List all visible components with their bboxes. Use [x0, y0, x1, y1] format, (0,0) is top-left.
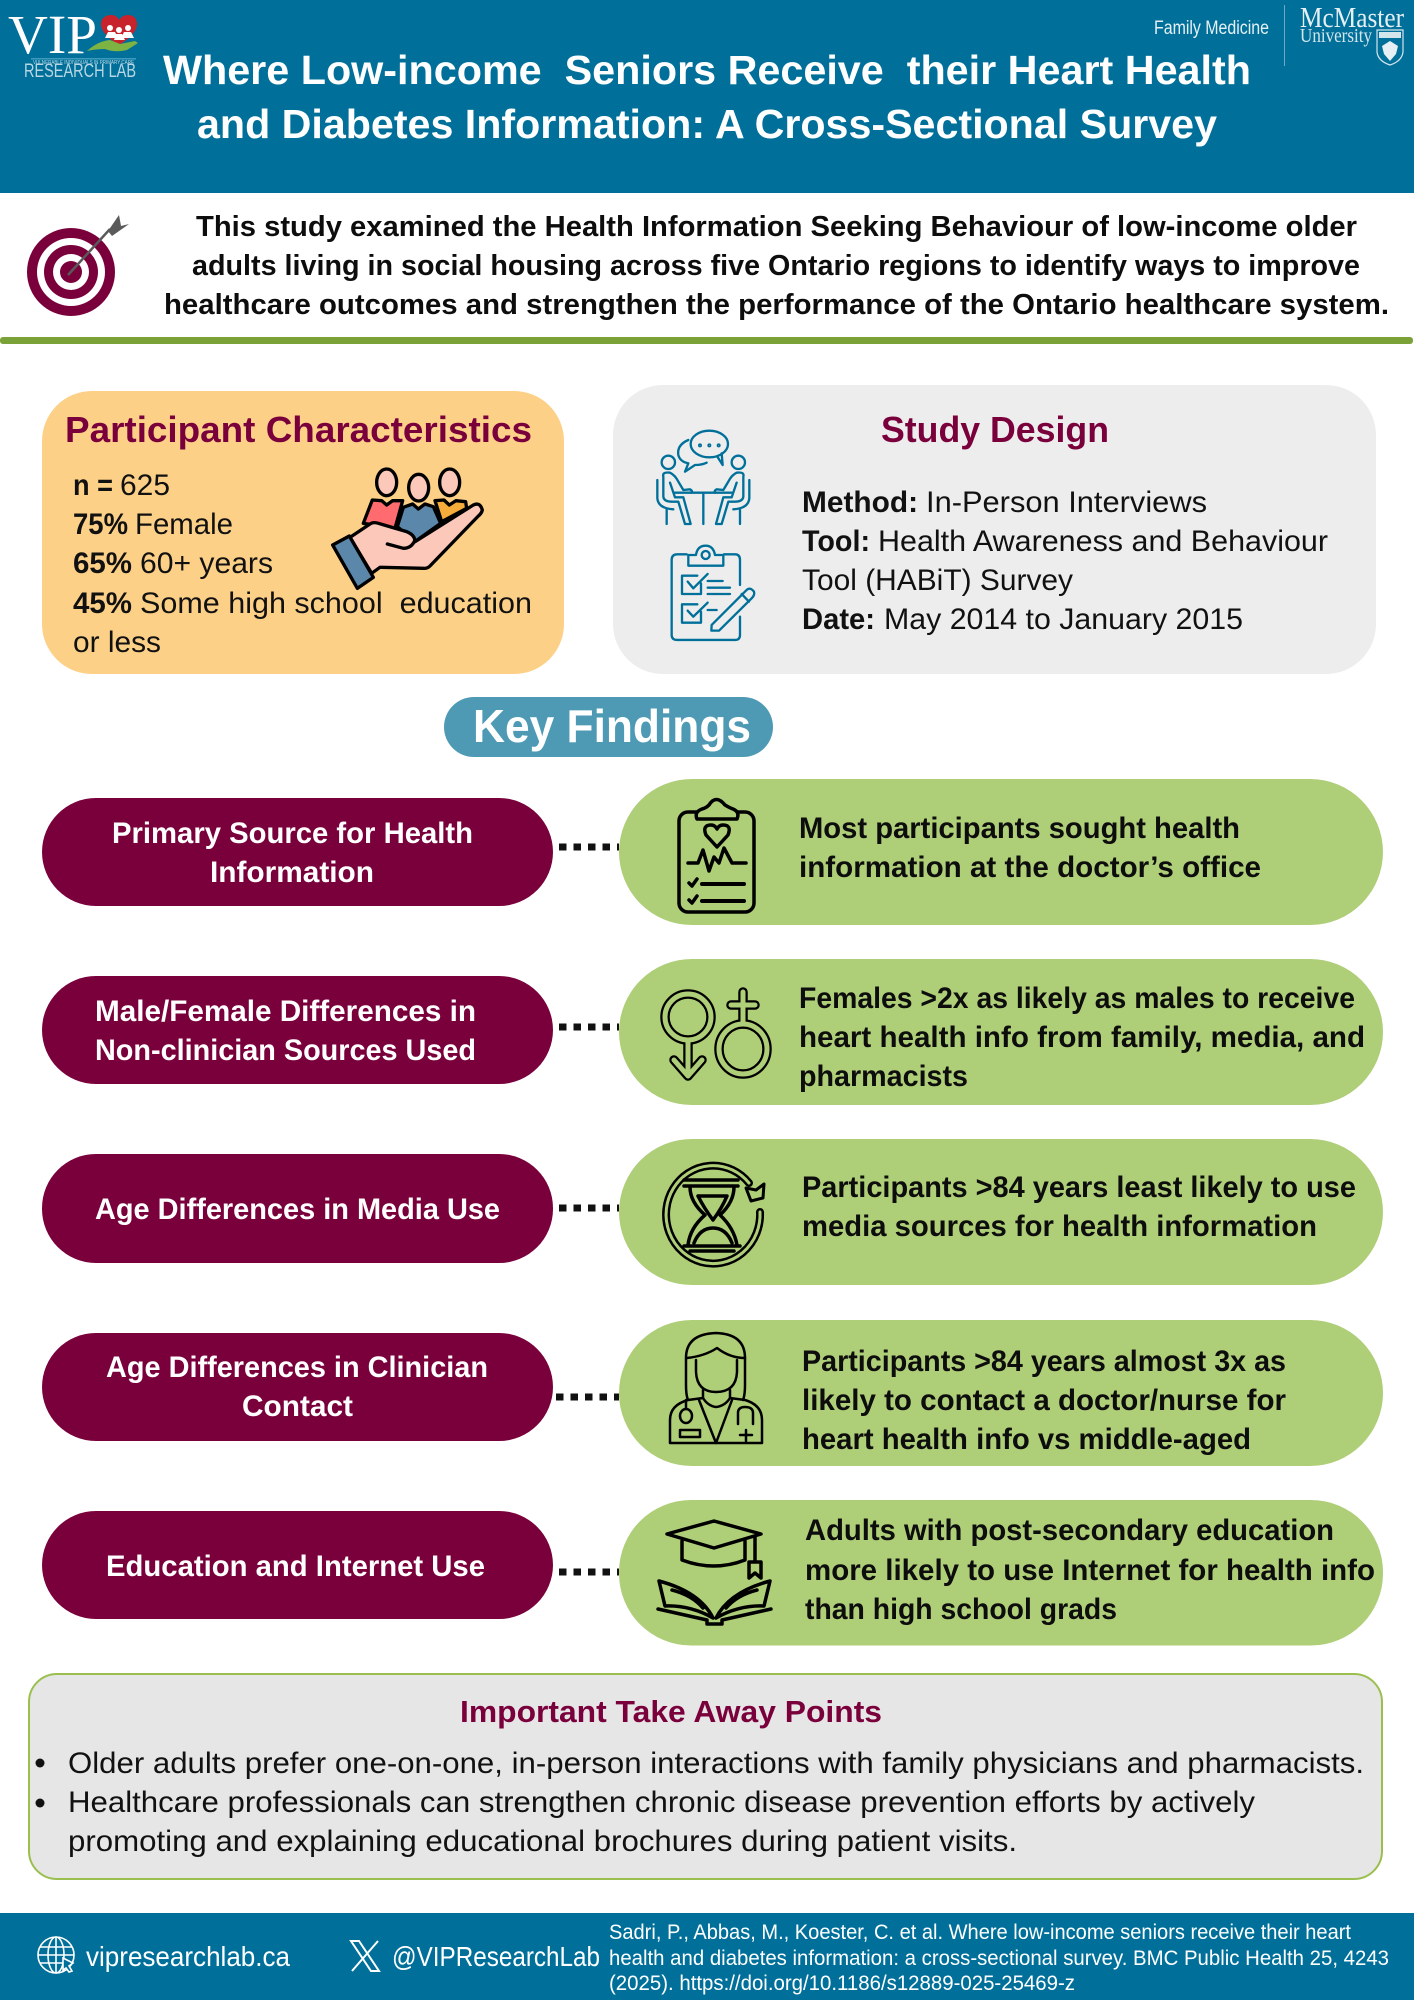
logo: VIP Research Lab: VULNERABLE INDIVIDUALS IN PRIMARY CARE [33, 60, 135, 66]
icon: target with arrow [27, 215, 129, 316]
dotted connector [556, 1394, 619, 1400]
heading: study design: Study Design [881, 409, 1109, 450]
participant stats: or less [73, 626, 161, 659]
citation: Sadri, P., Abbas, M., Koester, C. et al. Where low-income seniors receive their heart [609, 1921, 1351, 1944]
intro text: healthcare outcomes and strengthen the performance of the Ontario healthcare system. [164, 289, 1389, 321]
label pill: Education and Internet Use [106, 1550, 485, 1583]
icon: female doctor [670, 1333, 762, 1443]
participant stats: 75% [73, 508, 128, 541]
social handle: @VIPResearchLab [392, 1941, 600, 1972]
citation: (2025). https://doi.org/10.1186/s12889-025-25469-z [609, 1972, 1075, 1995]
icon: clipboard checklist [672, 546, 754, 640]
result pill [619, 1500, 1383, 1646]
header banner [0, 0, 1414, 193]
icon: graduation cap and book [658, 1521, 771, 1624]
intro text: This study examined the Health Information Seeking Behaviour of low-income older [196, 211, 1357, 243]
logo: McMaster Family Medicine: Family Medicine [1154, 18, 1269, 39]
label pill: Age Differences in Media Use [95, 1193, 500, 1226]
study design details: Tool: [802, 525, 870, 558]
logo: McMaster Family Medicine: University [1300, 25, 1372, 47]
participant stats [73, 469, 532, 659]
take away bullets: promoting and explaining educational brochures during patient visits. [68, 1825, 1017, 1858]
heading: important take away points: Important Take Away Points [460, 1694, 882, 1729]
result pill [619, 1139, 1383, 1285]
finding row 4: age and clinician contact [42, 1320, 1383, 1466]
dotted connector [559, 1568, 619, 1576]
logo: VIP Research Lab [8, 4, 138, 82]
panel: participant characteristics [42, 391, 564, 674]
participant stats: 60+ years [140, 547, 273, 580]
study design details: Date: [802, 603, 875, 636]
result pill: pharmacists [799, 1060, 968, 1093]
label pill [42, 798, 553, 906]
result pill [619, 779, 1383, 925]
study design details: May 2014 to January 2015 [884, 603, 1243, 636]
logo: McMaster Family Medicine [1154, 2, 1404, 66]
participant stats: Some high school education [140, 587, 532, 620]
label pill [42, 1511, 553, 1619]
icon: X logo [351, 1941, 379, 1971]
finding row 2: male/female differences [42, 959, 1383, 1105]
label pill [42, 1333, 553, 1441]
finding row 1: primary source [42, 779, 1383, 925]
dotted connector [559, 844, 619, 850]
panel: study design [613, 385, 1376, 674]
citation: health and diabetes information: a cross-sectional survey. BMC Public Health 25, 4243 [609, 1947, 1389, 1970]
icon: hand holding people [333, 469, 482, 588]
result pill: Participants >84 years almost 3x as [802, 1345, 1286, 1378]
result pill: heart health info vs middle-aged [802, 1423, 1251, 1456]
result pill: Most participants sought health [799, 812, 1240, 845]
dotted connector [559, 1204, 619, 1212]
icon: hourglass [666, 1166, 764, 1264]
logo: VIP Research Lab: RESEARCH LAB [24, 61, 136, 82]
result pill: heart health info from family, media, and [799, 1021, 1365, 1054]
result pill [619, 1320, 1383, 1466]
panel: take away points [29, 1674, 1382, 1879]
participant stats: n = [73, 469, 113, 502]
title: and Diabetes Information: A Cross-Sectional Survey [197, 101, 1217, 147]
title: Where Low-income Seniors Receive their Heart Health [163, 47, 1251, 93]
icon: globe [38, 1937, 74, 1973]
label pill: Non-clinician Sources Used [95, 1034, 476, 1067]
finding row 5: education and internet [42, 1500, 1383, 1646]
label pill: Age Differences in Clinician [106, 1351, 488, 1384]
participant stats: Female [135, 508, 233, 541]
label pill [42, 976, 553, 1084]
take away bullets [36, 1747, 1364, 1858]
result pill: Females >2x as likely as males to receive [799, 982, 1355, 1015]
label pill: Male/Female Differences in [95, 995, 476, 1028]
footer bar [0, 1913, 1414, 2000]
citation [609, 1921, 1389, 1995]
result pill: more likely to use Internet for health info [805, 1554, 1375, 1587]
intro text [164, 211, 1389, 321]
logo: VIP Research Lab: VIP [8, 4, 97, 65]
website: vipresearchlab.ca [86, 1941, 290, 1972]
participant stats: 65% [73, 547, 132, 580]
label pill: Contact [242, 1390, 353, 1423]
study design details [802, 486, 1328, 636]
take away bullets: Older adults prefer one-on-one, in-person interactions with family physicians and pharmacists. [68, 1747, 1364, 1780]
icon: medical clipboard [679, 800, 754, 912]
result pill [619, 959, 1383, 1105]
participant stats: 625 [120, 469, 170, 502]
participant stats: 45% [73, 587, 132, 620]
title [163, 47, 1251, 147]
result pill: likely to contact a doctor/nurse for [802, 1384, 1287, 1417]
take away bullets: Healthcare professionals can strengthen chronic disease prevention efforts by actively [68, 1786, 1255, 1819]
study design details: Health Awareness and Behaviour [878, 525, 1328, 558]
finding row 3: age and media [42, 1139, 1383, 1285]
study design details: In-Person Interviews [926, 486, 1207, 519]
result pill: than high school grads [805, 1593, 1117, 1626]
icon: gender symbols [665, 992, 767, 1076]
result pill: information at the doctor’s office [799, 851, 1261, 884]
result pill: media sources for health information [802, 1210, 1317, 1243]
intro text: adults living in social housing across five Ontario regions to identify ways to improve [192, 250, 1360, 282]
study design details: Method: [802, 486, 918, 519]
dotted connector [559, 1024, 619, 1030]
heading: participant characteristics: Participant Characteristics [65, 409, 532, 450]
heading: key findings: Key Findings [473, 700, 751, 752]
icon: interview [657, 431, 749, 524]
result pill: Participants >84 years least likely to use [802, 1171, 1356, 1204]
label pill: Information [210, 856, 374, 889]
label pill [42, 1154, 553, 1263]
label pill: Primary Source for Health [112, 817, 473, 850]
study design details: Tool (HABiT) Survey [802, 564, 1073, 597]
result pill: Adults with post-secondary education [805, 1514, 1334, 1547]
